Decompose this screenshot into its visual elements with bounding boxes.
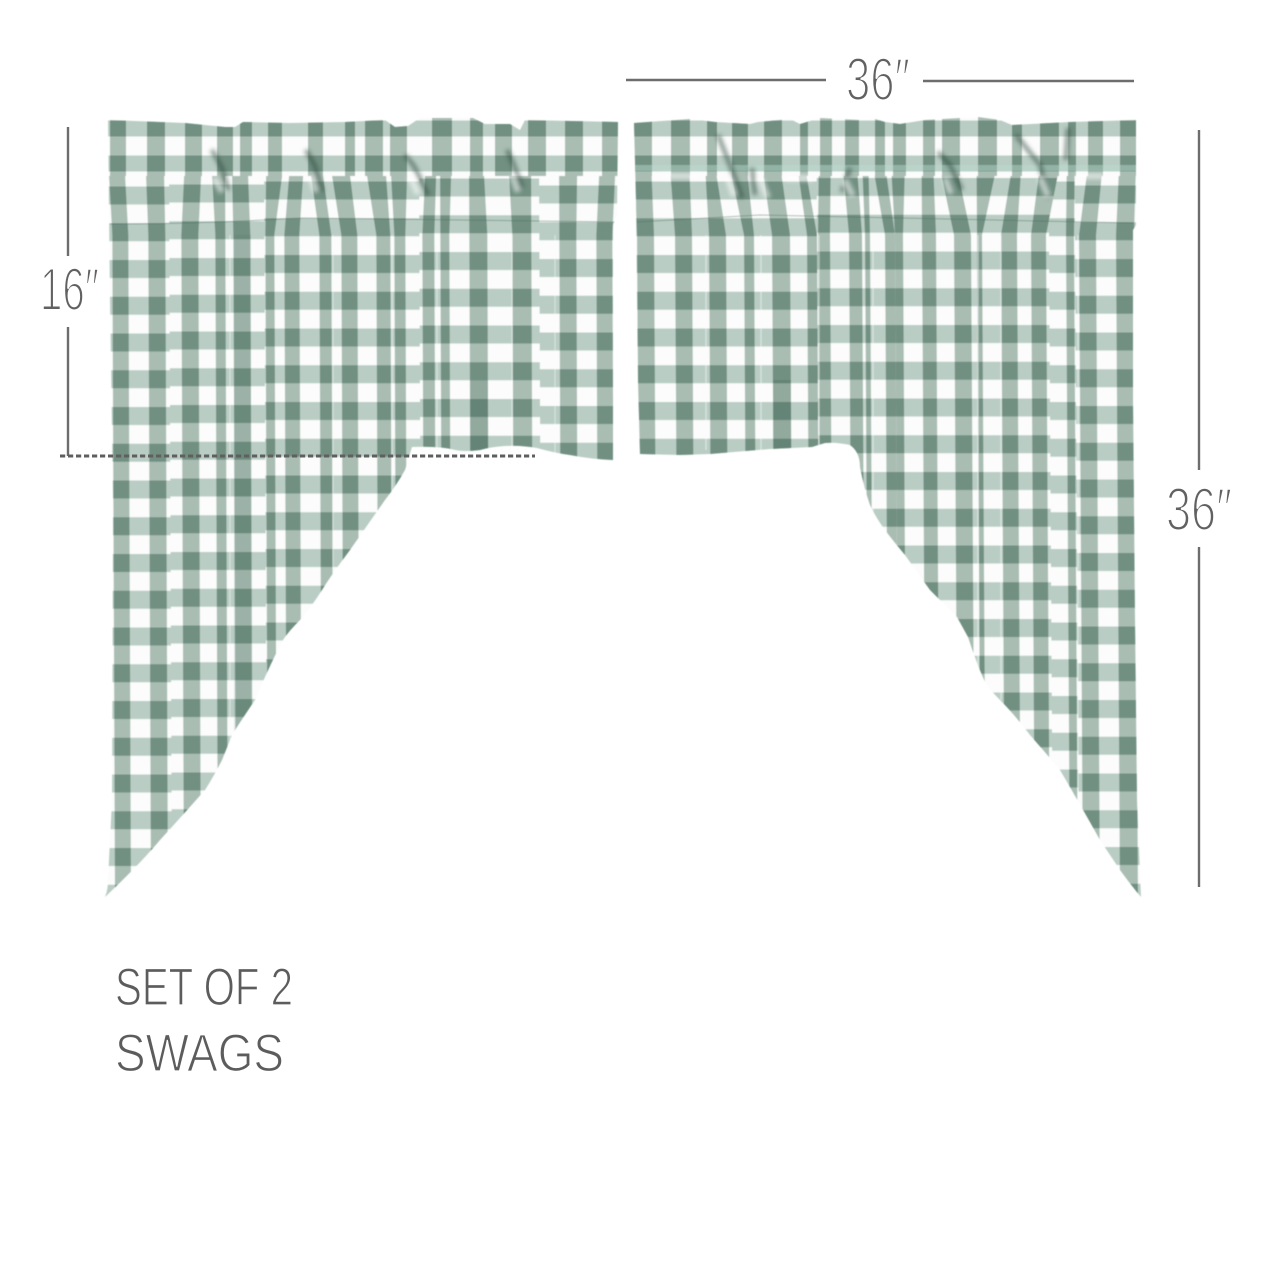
left swag gathered rod pocket	[108, 118, 619, 176]
dimension: top width 36 inches: 36″	[846, 46, 910, 113]
caption: set of 2 swags: SWAGS	[115, 1024, 284, 1083]
right swag gather shadows	[660, 128, 1104, 198]
left swag gather shadows	[212, 150, 522, 195]
left swag gingham body	[94, 176, 622, 900]
caption: set of 2 swags	[115, 958, 293, 1083]
panel: right swag curtain	[624, 110, 1149, 900]
dimension: left length 16 inches: 16″	[40, 256, 99, 323]
right swag gathered rod pocket	[633, 116, 1137, 176]
left swag fold shading	[110, 217, 614, 740]
right swag gingham body	[624, 176, 1149, 900]
caption: set of 2 swags: SET OF 2	[115, 958, 293, 1017]
dimension: right length 36 inches: 36″	[1166, 476, 1232, 543]
right swag fold shading	[634, 164, 1136, 788]
panel: left swag curtain	[94, 110, 625, 900]
